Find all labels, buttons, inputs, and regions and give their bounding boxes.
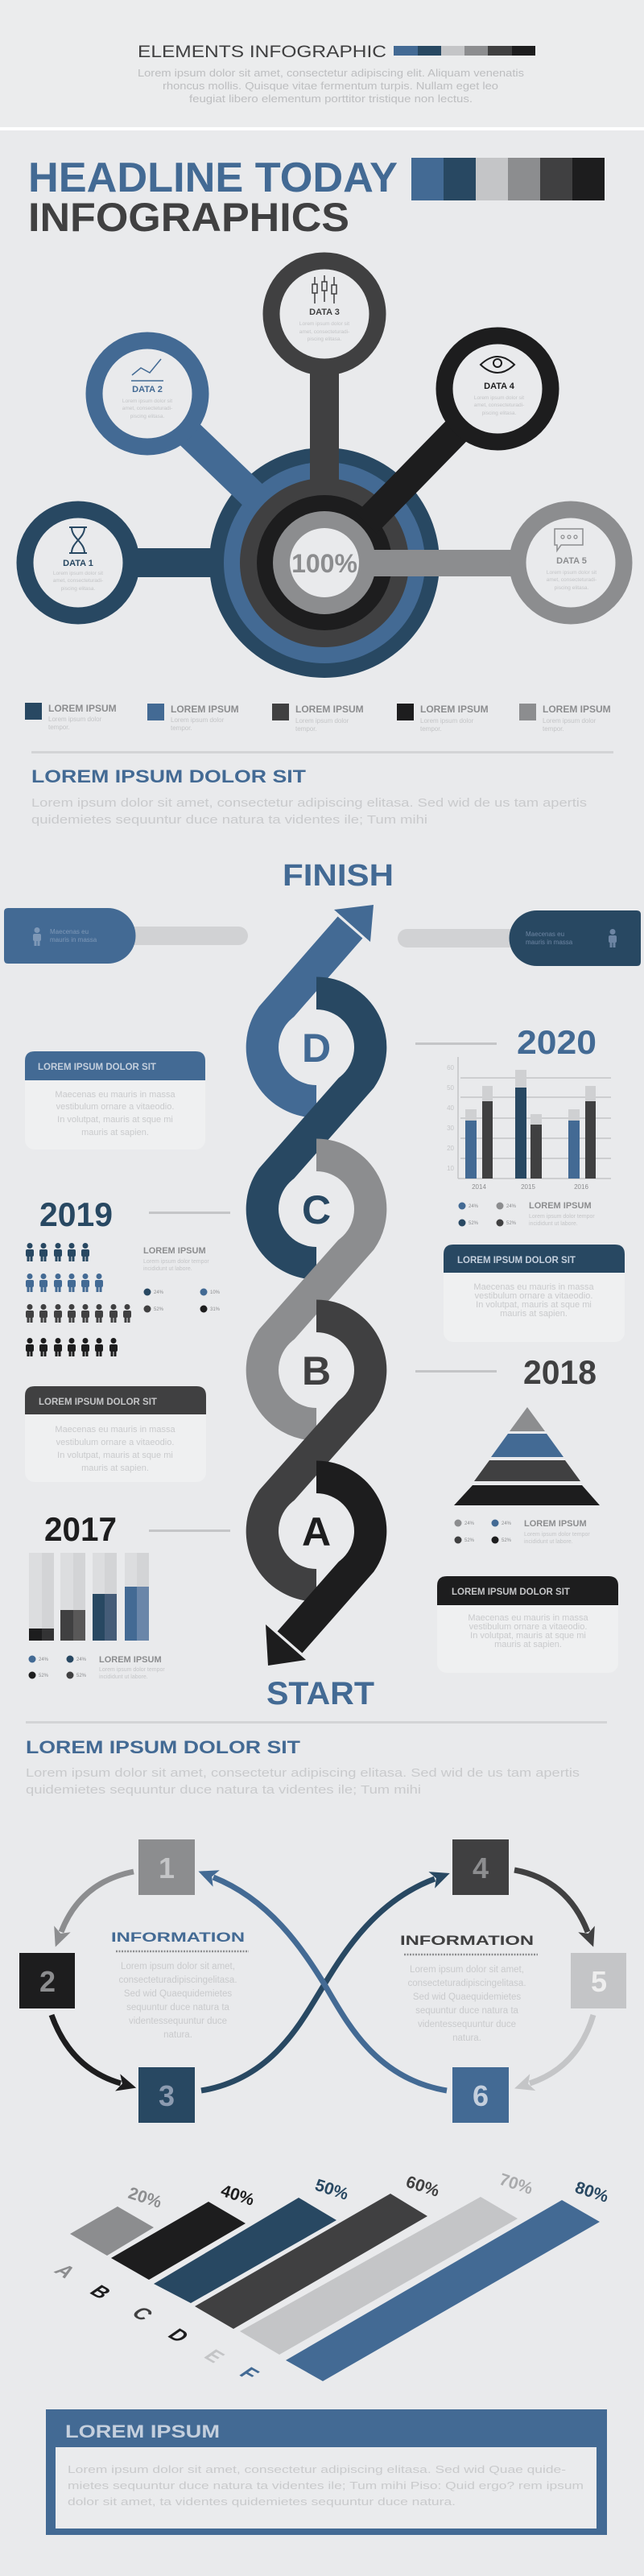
palette swatches <box>411 158 605 200</box>
box right black: In volutpat, mauris at sque mi <box>470 1631 586 1641</box>
top title: ELEMENTS INFOGRAPHIC <box>138 43 386 61</box>
box right navy: LOREM IPSUM DOLOR SIT <box>457 1256 576 1265</box>
pyramid <box>454 1407 600 1505</box>
legend row: LOREM IPSUM <box>48 703 117 714</box>
legend row <box>25 703 611 733</box>
step 1 <box>138 1839 195 1895</box>
legend 2019: 10% <box>210 1290 221 1295</box>
circle B <box>279 1332 354 1408</box>
bar chart 2020: 50 <box>447 1084 455 1092</box>
stacked columns 2017 <box>29 1553 149 1641</box>
legend 2017: 24% <box>76 1657 87 1662</box>
legend 2018: incididunt ut labore. <box>524 1539 573 1545</box>
2017 block: 2017 <box>44 1510 117 1548</box>
data 1 <box>25 510 131 616</box>
step 2: 2 <box>39 1965 56 1998</box>
legend row: Lorem ipsum dolor <box>295 717 349 724</box>
information right: sequuntur duce natura ta <box>415 2006 519 2016</box>
percentage labels <box>126 2170 611 2212</box>
bar chart 2020: 10 <box>447 1165 455 1172</box>
legend 2018: 52% <box>464 1538 475 1543</box>
data 3: amet, consecteturadi- <box>299 329 349 335</box>
box left blue: mauris at sapien. <box>81 1128 149 1137</box>
top description: rhoncus mollis. Quisque vitae fermentum turpis. Nullam eget leo <box>163 80 498 92</box>
circle B: B <box>302 1348 331 1393</box>
category letters <box>49 2261 264 2384</box>
center label: 100% <box>291 549 357 578</box>
category letters: B <box>85 2282 116 2302</box>
finish label: FINISH <box>283 859 394 893</box>
data 3: DATA 3 <box>309 308 340 317</box>
section heading 1: quidemietes sequuntur duce natura ta videntes ile; Tum mihi <box>31 814 427 827</box>
box right navy: mauris at sapien. <box>500 1309 568 1319</box>
box left blue: In volutpat, mauris at sque mi <box>57 1115 173 1125</box>
legend row: Lorem ipsum dolor <box>171 716 225 724</box>
box right black: mauris at sapien. <box>494 1640 562 1649</box>
information right: natura. <box>452 2033 481 2043</box>
step 5: 5 <box>591 1965 607 1998</box>
legend row: tempor. <box>420 725 442 733</box>
bar chart 2020: 2015 <box>521 1183 535 1191</box>
bar chart 2020: 60 <box>447 1064 455 1071</box>
data 2: amet, consecteturadi- <box>122 406 172 411</box>
data 5: Lorem ipsum dolor sit <box>547 570 597 576</box>
2018 block <box>415 1353 600 1545</box>
legend 2019: incididunt ut labore. <box>143 1266 192 1272</box>
top description: feugiat libero elementum porttitor tristique non lectus. <box>189 93 473 105</box>
box right black <box>437 1576 618 1673</box>
legend row: LOREM IPSUM <box>543 704 611 715</box>
2017 block <box>29 1510 230 1680</box>
2019 block: 2019 <box>39 1195 113 1233</box>
top header <box>138 43 535 105</box>
information left: INFORMATION <box>111 1930 245 1945</box>
legend 2020 <box>459 1201 595 1227</box>
information left: Lorem ipsum dolor sit amet, <box>121 1962 235 1971</box>
section heading 1: LOREM IPSUM DOLOR SIT <box>31 766 307 786</box>
percentage labels: 80% <box>572 2178 611 2207</box>
step 3 <box>138 2067 195 2123</box>
box right navy <box>444 1245 625 1342</box>
top description <box>138 67 525 105</box>
top description: Lorem ipsum dolor sit amet, consectetur adipiscing elit. Aliquam venenatis <box>138 67 525 79</box>
step 4 <box>452 1839 509 1895</box>
section heading 2: LOREM IPSUM DOLOR SIT <box>26 1737 301 1757</box>
box left dark: mauris at sapien. <box>81 1463 149 1473</box>
data 4: Lorem ipsum dolor sit <box>474 395 524 401</box>
section heading 2: quidemietes sequuntur duce natura ta videntes ile; Tum mihi <box>26 1784 421 1797</box>
box right navy: vestibulum ornare a vitaeodio. <box>475 1291 592 1301</box>
legend row: tempor. <box>48 724 70 731</box>
legend 2017: 52% <box>39 1674 49 1678</box>
category letters: C <box>126 2304 158 2324</box>
legend 2018: Lorem ipsum dolor tempor <box>524 1532 590 1538</box>
data 2: DATA 2 <box>132 385 163 394</box>
percentage labels: 50% <box>312 2176 351 2204</box>
pill right: mauris in massa <box>526 939 573 946</box>
bar chart 2020: 20 <box>447 1145 455 1152</box>
legend 2020: 52% <box>469 1221 479 1226</box>
data 5 <box>518 510 624 616</box>
2020 block <box>415 1023 611 1227</box>
information left: Sed wid Quaequidemietes <box>124 1989 232 1999</box>
legend 2019: 31% <box>210 1307 221 1312</box>
legend 2017: Lorem ipsum dolor tempor <box>99 1667 165 1673</box>
legend 2018: 24% <box>502 1521 512 1526</box>
circle A: A <box>302 1509 331 1554</box>
legend 2017: 24% <box>39 1657 49 1662</box>
section heading 1 <box>31 766 587 827</box>
legend 2018: LOREM IPSUM <box>524 1519 587 1529</box>
step 3: 3 <box>159 2079 175 2112</box>
legend 2020: LOREM IPSUM <box>529 1201 592 1211</box>
legend 2018 <box>454 1519 590 1545</box>
legend row: LOREM IPSUM <box>420 704 489 715</box>
step 5 <box>571 1953 626 2008</box>
spiral ribbon <box>262 905 374 1666</box>
box right black: Maecenas eu mauris in massa <box>468 1613 588 1623</box>
step 4: 4 <box>473 1852 489 1885</box>
step 6 <box>452 2067 509 2123</box>
legend 2020: 24% <box>506 1204 517 1209</box>
data 3: piscing elitasa. <box>308 336 342 342</box>
information right: videntessequuntur duce <box>418 2020 516 2029</box>
circle C <box>279 1171 354 1247</box>
section heading 2 <box>26 1737 580 1797</box>
box right navy: Maecenas eu mauris in massa <box>473 1282 594 1292</box>
data 2 <box>94 341 200 447</box>
data 1: amet, consecteturadi- <box>53 578 103 584</box>
category letters: F <box>234 2364 264 2384</box>
circle A <box>279 1493 354 1569</box>
data 4: DATA 4 <box>484 382 515 391</box>
data 1: piscing elitasa. <box>61 586 96 592</box>
bar chart 2020: 40 <box>447 1104 455 1112</box>
category letters: D <box>163 2326 194 2346</box>
bar chart 2020: 2014 <box>472 1183 486 1191</box>
cycle arrows <box>52 1870 593 2091</box>
legend row: tempor. <box>171 724 192 732</box>
box left dark: In volutpat, mauris at sque mi <box>57 1451 173 1460</box>
percentage labels: 60% <box>403 2173 442 2201</box>
information left: videntessequuntur duce <box>129 2017 227 2026</box>
legend 2020: Lorem ipsum dolor tempor <box>529 1214 595 1220</box>
legend 2017: 52% <box>76 1674 87 1678</box>
circle D <box>279 1009 354 1085</box>
legend 2019: LOREM IPSUM <box>143 1246 206 1256</box>
legend 2020: 52% <box>506 1221 517 1226</box>
pill left: Maecenas eu <box>50 928 89 935</box>
2019 block <box>26 1195 230 1356</box>
information left: sequuntur duce natura ta <box>126 2003 230 2013</box>
bar chart 2020: 30 <box>447 1125 455 1132</box>
2020 block: 2020 <box>517 1023 597 1061</box>
headline <box>28 155 398 240</box>
data 5: amet, consecteturadi- <box>547 577 597 583</box>
bar chart 2020 <box>447 1057 611 1191</box>
box left dark: Maecenas eu mauris in massa <box>55 1425 175 1435</box>
legend 2020: incididunt ut labore. <box>529 1221 578 1227</box>
information left <box>111 1930 249 2040</box>
data 1: DATA 1 <box>63 559 93 568</box>
data 4 <box>444 336 551 442</box>
bar chart 2020: 2016 <box>574 1183 588 1191</box>
isometric bar chart <box>49 2170 611 2384</box>
step 6: 6 <box>473 2079 489 2112</box>
data 3 <box>271 261 378 367</box>
bottom box <box>46 2409 607 2535</box>
percentage labels: 70% <box>497 2170 535 2198</box>
infinity cycle <box>19 1839 626 2123</box>
legend 2017: LOREM IPSUM <box>99 1655 162 1665</box>
percentage labels: 40% <box>218 2182 257 2210</box>
box right navy: In volutpat, mauris at sque mi <box>476 1300 592 1310</box>
section heading 2: Lorem ipsum dolor sit amet, consectetur adipiscing elitasa. Sed wid de us tam apertis <box>26 1767 580 1780</box>
information right: INFORMATION <box>400 1933 534 1948</box>
box left blue: LOREM IPSUM DOLOR SIT <box>38 1063 156 1072</box>
top color bar <box>394 46 535 56</box>
information right <box>400 1933 538 2043</box>
section heading 1: Lorem ipsum dolor sit amet, consectetur adipiscing elitasa. Sed wid de us tam apertis <box>31 797 587 810</box>
legend 2018: 24% <box>464 1521 475 1526</box>
circle D: D <box>302 1026 331 1071</box>
pill left: mauris in massa <box>50 936 97 943</box>
box left dark: vestibulum ornare a vitaeodio. <box>56 1438 174 1447</box>
legend 2019: 24% <box>154 1290 164 1295</box>
headline: INFOGRAPHICS <box>28 195 349 240</box>
bottom box: LOREM IPSUM <box>65 2421 220 2442</box>
legend row: LOREM IPSUM <box>295 704 364 715</box>
pill left <box>4 908 248 964</box>
legend 2019: Lorem ipsum dolor tempor <box>143 1259 209 1265</box>
headline: HEADLINE TODAY <box>28 155 398 201</box>
bottom box: dolor sit amet, ta videntes quidemietes sequuntur duce natura. <box>68 2496 456 2508</box>
step 2 <box>19 1953 75 2008</box>
legend row: Lorem ipsum dolor <box>420 717 474 724</box>
legend row: LOREM IPSUM <box>171 704 239 715</box>
start label: START <box>266 1676 374 1711</box>
percentage labels: 20% <box>126 2184 164 2212</box>
legend row: Lorem ipsum dolor <box>543 717 597 724</box>
box left blue: vestibulum ornare a vitaeodio. <box>56 1102 174 1112</box>
data 5: piscing elitasa. <box>555 585 589 591</box>
data 1: Lorem ipsum dolor sit <box>53 571 103 576</box>
data 4: amet, consecteturadi- <box>474 402 524 408</box>
data 2: Lorem ipsum dolor sit <box>122 398 172 404</box>
legend 2017 <box>29 1655 165 1680</box>
legend row: tempor. <box>543 725 564 733</box>
box left blue: Maecenas eu mauris in massa <box>55 1090 175 1100</box>
legend row: Lorem ipsum dolor <box>48 716 102 723</box>
information left: natura. <box>163 2030 192 2040</box>
step 1: 1 <box>159 1852 175 1885</box>
legend 2019: 52% <box>154 1307 164 1312</box>
information left: consecteturadipiscingelitasa. <box>118 1975 237 1985</box>
hub diagram <box>25 261 624 678</box>
information right: Lorem ipsum dolor sit amet, <box>410 1965 524 1975</box>
bottom box: mietes sequuntur duce natura ta videntes ile; Tum mihi Piso: Quid ergo? rem ipsum <box>68 2480 584 2491</box>
circle C: C <box>302 1187 331 1232</box>
category letters: A <box>49 2261 80 2281</box>
pill right <box>398 910 641 966</box>
category letters: E <box>199 2347 229 2367</box>
data 4: piscing elitasa. <box>482 411 517 416</box>
bottom box: Lorem ipsum dolor sit amet, consectetur adipiscing elitasa. Sed wid Quae quide- <box>68 2464 566 2475</box>
box right black: vestibulum ornare a vitaeodio. <box>469 1622 587 1632</box>
legend row: tempor. <box>295 725 317 733</box>
data 2: piscing elitasa. <box>130 414 165 419</box>
box left blue <box>25 1051 205 1150</box>
information right: Sed wid Quaequidemietes <box>413 1992 521 2002</box>
box left dark <box>25 1386 206 1482</box>
box left dark: LOREM IPSUM DOLOR SIT <box>39 1397 157 1407</box>
data 3: Lorem ipsum dolor sit <box>299 321 349 327</box>
legend 2018: 52% <box>502 1538 512 1543</box>
people pictogram <box>26 1243 131 1356</box>
legend 2017: incididunt ut labore. <box>99 1674 148 1680</box>
legend 2019 <box>143 1246 221 1312</box>
information right: consecteturadipiscingelitasa. <box>407 1979 526 1988</box>
legend 2020: 24% <box>469 1204 479 1209</box>
box right black: LOREM IPSUM DOLOR SIT <box>452 1587 570 1597</box>
pill right: Maecenas eu <box>526 931 564 938</box>
data 5: DATA 5 <box>556 556 587 566</box>
2018 block: 2018 <box>523 1353 597 1391</box>
